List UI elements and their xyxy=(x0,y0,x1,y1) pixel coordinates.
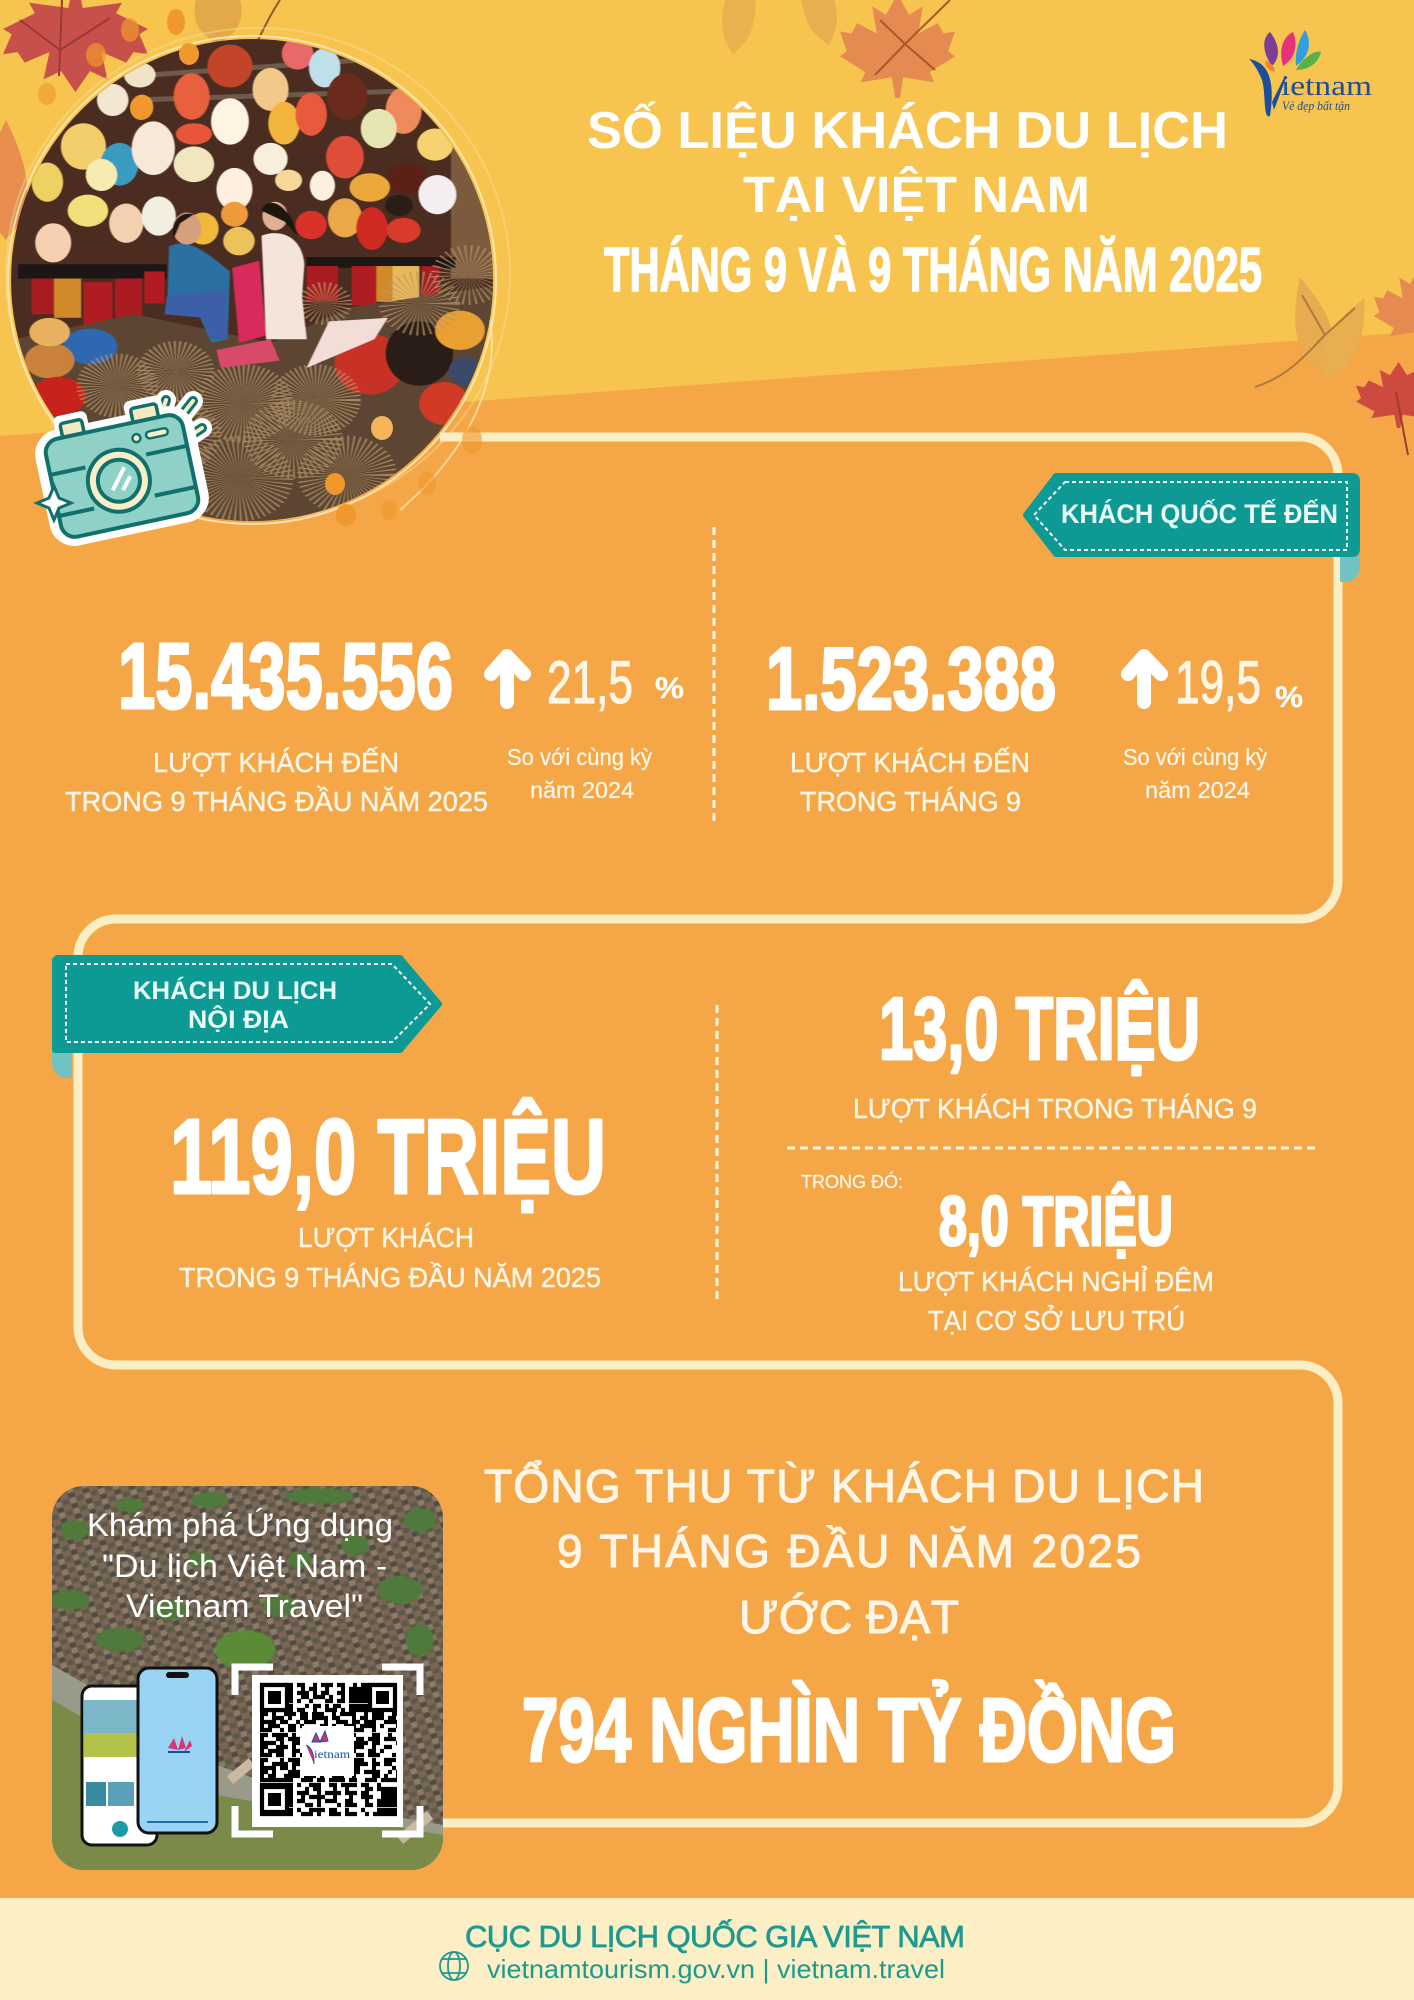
sparkle xyxy=(37,486,71,520)
phone: home screen xyxy=(82,1686,157,1845)
app promo text: Khám phá Ứng dụng xyxy=(87,1507,393,1543)
revenue block: ƯỚC ĐẠT xyxy=(739,1591,959,1643)
value: 15.435.556 xyxy=(118,624,453,728)
QR finder patterns xyxy=(262,1685,395,1812)
camera body xyxy=(43,413,201,539)
tag body xyxy=(1026,476,1357,554)
caption: LƯỢT KHÁCH ĐẾN xyxy=(790,747,1030,778)
tag: domestic tourists xyxy=(52,958,439,1078)
straw lantern frames xyxy=(97,260,488,500)
white fabric xyxy=(307,318,388,368)
title xyxy=(587,101,1262,305)
stat: 9-month domestic tourists: TRONG 9 THÁNG ĐẦU NĂM 2025 xyxy=(179,1262,601,1293)
footer: organisation name: CỤC DU LỊCH QUỐC GIA VIỆT NAM xyxy=(465,1918,965,1954)
logo petals xyxy=(1264,30,1321,72)
label: TRONG ĐÓ: xyxy=(801,1171,903,1192)
footer: websites: vietnamtourism.gov.vn | vietnam.travel xyxy=(487,1954,945,1984)
stat: overnight stays: TẠI CƠ SỞ LƯU TRÚ xyxy=(928,1304,1185,1336)
value: 8,0 TRIỆU xyxy=(939,1181,1173,1260)
growth: 19,5%: % xyxy=(1275,681,1303,714)
QR code: ietnam xyxy=(314,1747,351,1761)
red bags row xyxy=(18,257,455,329)
logo slogan: Vẻ đẹp bất tận xyxy=(1282,98,1350,113)
decorative autumn leaves: top left xyxy=(0,0,280,240)
hanging lanterns xyxy=(32,37,456,262)
heading: TỔNG THU TỪ KHÁCH DU LỊCH xyxy=(484,1460,1204,1512)
tag fold xyxy=(52,1050,72,1078)
tag: domestic tourists: NỘI ĐỊA xyxy=(188,1004,289,1034)
flash marks xyxy=(160,400,202,436)
value: 794 NGHÌN TỶ ĐỒNG xyxy=(522,1679,1176,1781)
woman in white ao dai xyxy=(262,202,307,339)
app promo text: "Du lịch Việt Nam - xyxy=(102,1548,387,1584)
caption: LƯỢT KHÁCH NGHỈ ĐÊM xyxy=(898,1265,1214,1297)
caption: LƯỢT KHÁCH ĐẾN xyxy=(153,747,399,778)
caption: LƯỢT KHÁCH xyxy=(298,1222,474,1253)
tag label: KHÁCH QUỐC TẾ ĐẾN xyxy=(1061,497,1338,529)
camera sticker icon xyxy=(37,391,203,540)
tag: international arrivals xyxy=(1026,476,1360,582)
app promo text: Vietnam Travel" xyxy=(126,1588,363,1624)
value: 13,0 TRIỆU xyxy=(879,979,1200,1078)
growth value: 19,5 xyxy=(1175,649,1261,716)
tag dashed border xyxy=(1034,482,1347,550)
tag dashed border xyxy=(66,964,430,1042)
up arrow xyxy=(491,656,524,702)
lower stall floor with straw frames xyxy=(14,286,496,536)
serpentine panel outline xyxy=(78,437,1338,1823)
growth: 21,5% xyxy=(491,649,684,803)
stat: 9-month international arrivals xyxy=(65,624,488,817)
aerial photo of town xyxy=(50,1486,443,1870)
logo wordmark: ietnam xyxy=(1281,70,1373,102)
camera assembly xyxy=(37,391,203,540)
tag fold xyxy=(1340,555,1360,582)
stat: overnight stays xyxy=(801,1171,1214,1336)
decorative autumn leaves: right side xyxy=(1255,268,1414,455)
camera lens xyxy=(82,444,156,518)
growth: 19,5%: năm 2024 xyxy=(1145,777,1250,803)
stacked finished lanterns xyxy=(25,311,485,425)
logo V stroke xyxy=(1249,59,1286,116)
sticker outline xyxy=(41,412,203,540)
QR code xyxy=(252,1675,403,1827)
comparison note: So với cùng kỳ xyxy=(1123,744,1267,770)
caption: LƯỢT KHÁCH TRONG THÁNG 9 xyxy=(853,1093,1257,1124)
comparison note: So với cùng kỳ xyxy=(507,744,652,770)
Vietnam tourism logo xyxy=(1249,30,1373,116)
footer band xyxy=(0,1898,1414,2000)
stat: 9-month international arrivals: TRONG 9 THÁNG ĐẦU NĂM 2025 xyxy=(65,786,488,817)
revenue block: 9 THÁNG ĐẦU NĂM 2025 xyxy=(557,1525,1141,1577)
app promo card xyxy=(50,1486,443,1870)
tag label: KHÁCH DU LỊCH xyxy=(133,976,337,1005)
growth: 21,5%: năm 2024 xyxy=(530,777,634,803)
stat: September domestic tourists xyxy=(853,979,1257,1124)
growth: 19,5% xyxy=(1123,649,1303,803)
stat: 9-month domestic tourists xyxy=(170,1098,606,1293)
app promo text xyxy=(87,1507,393,1624)
stat: September international arrivals: TRONG THÁNG 9 xyxy=(800,786,1021,817)
growth: 21,5%: % xyxy=(655,672,684,705)
decorative autumn leaves: top centre xyxy=(717,0,955,98)
photo: lantern shop in a circle xyxy=(0,30,505,536)
phone: splash screen xyxy=(138,1668,217,1833)
QR brackets xyxy=(235,1667,420,1834)
camera top buttons xyxy=(60,419,85,439)
tag body xyxy=(55,958,439,1050)
value: 1.523.388 xyxy=(766,629,1056,728)
title line 2: TẠI VIỆT NAM xyxy=(743,165,1090,223)
pink fabric xyxy=(232,261,266,343)
stat: September international arrivals xyxy=(766,629,1056,817)
growth value: 21,5 xyxy=(547,649,633,716)
icon: globe www xyxy=(440,1952,468,1980)
value: 119,0 TRIỆU xyxy=(170,1098,606,1216)
QR centre logo xyxy=(302,1726,354,1776)
decorative wreath behind photo xyxy=(6,28,510,524)
roof beams xyxy=(148,58,398,102)
revenue block xyxy=(484,1460,1204,1781)
background: yellow header area xyxy=(0,0,1414,436)
wreath orange berries xyxy=(38,9,482,526)
woman in blue xyxy=(165,212,230,343)
title line 1: SỐ LIỆU KHÁCH DU LỊCH xyxy=(587,101,1228,160)
up arrow xyxy=(1128,656,1161,702)
